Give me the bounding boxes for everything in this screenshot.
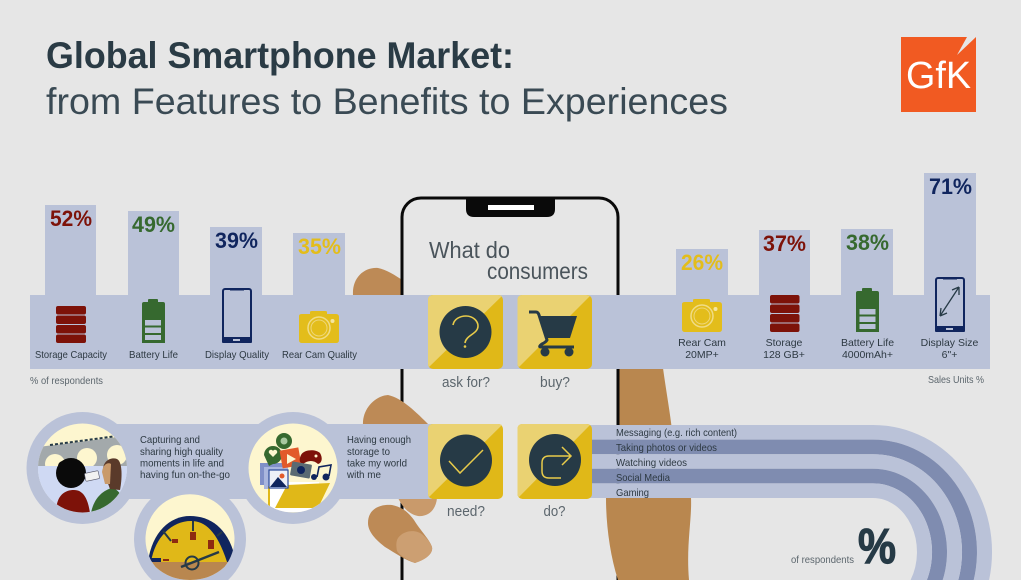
hand: right palm behind phone <box>610 360 672 430</box>
right labels: Rear Cam <box>678 337 726 349</box>
text: enough storage <box>346 434 411 481</box>
right labels: 20MP+ <box>685 349 719 361</box>
right labels: 6"+ <box>942 349 957 361</box>
left percentages: 35% <box>298 234 341 259</box>
right percentages: 37% <box>763 231 806 256</box>
axis note: sales units: Sales Units % <box>928 374 984 386</box>
hand: upper finger behind left band <box>363 395 430 426</box>
right labels: Storage <box>766 337 803 349</box>
title: Global Smartphone Market: <box>46 35 514 76</box>
icon: battery left <box>142 299 165 343</box>
icon: storage right <box>770 295 800 332</box>
right labels: 128 GB+ <box>763 349 805 361</box>
activity labels: Watching videos <box>616 457 687 469</box>
yellow tile: need <box>428 424 503 499</box>
icon: storage left <box>56 306 86 343</box>
activity labels: Messaging (e.g. rich content) <box>616 427 737 439</box>
text: capturing moments: moments in life and <box>140 458 224 470</box>
hand: lower finger knuckle <box>398 498 437 516</box>
text: capturing moments <box>140 434 230 481</box>
illustration: performance gauge <box>145 494 236 580</box>
heading: what do consumers <box>429 237 588 284</box>
right percentages <box>681 174 972 275</box>
right percentages: 71% <box>929 174 972 199</box>
text: enough storage: Having enough <box>347 434 411 446</box>
activity bands with arcs <box>590 425 992 580</box>
tile captions: do? <box>544 504 566 520</box>
tile captions <box>442 375 570 520</box>
yellow tile: buy <box>518 295 592 369</box>
right labels: Battery Life <box>841 337 894 349</box>
GfK logo <box>901 37 976 112</box>
left percentages: 52% <box>50 206 92 231</box>
illustration: storage folder of media <box>248 423 338 513</box>
title <box>46 35 728 122</box>
activity labels: Social Media <box>616 472 670 484</box>
axis note: % of respondents: % of respondents <box>30 375 103 387</box>
activity labels: Taking photos or videos <box>616 442 717 454</box>
icon: camera right <box>682 299 722 332</box>
right percentages: 26% <box>681 250 723 275</box>
left percentages: 39% <box>215 228 258 253</box>
left labels: Battery Life <box>129 349 178 361</box>
left labels <box>35 349 358 361</box>
icon: display size with arrow <box>935 277 965 332</box>
hand: thumb behind phone <box>353 268 410 295</box>
left percentages <box>50 206 341 259</box>
top panel: band and bars <box>30 173 990 369</box>
icon: battery right <box>856 288 879 332</box>
left percentages: 49% <box>132 212 175 237</box>
title: from Features to Benefits to Experiences <box>46 81 728 122</box>
hand: palm over phone <box>606 498 691 580</box>
lower left band with circles <box>26 412 432 580</box>
hand: lower finger with nail <box>368 505 432 563</box>
right percentages: 38% <box>846 230 889 255</box>
yellow tile: ask for <box>428 295 503 369</box>
left labels: Rear Cam Quality <box>282 349 358 361</box>
heading: what do consumers: consumers <box>487 258 588 284</box>
tile captions: ask for? <box>442 375 490 391</box>
text: capturing moments: having fun on-the-go <box>140 469 230 481</box>
phone outline <box>402 198 618 580</box>
yellow tile: do <box>518 424 592 499</box>
tile captions: buy? <box>540 375 570 391</box>
activity labels <box>616 427 737 499</box>
large percent sign: % <box>858 520 896 574</box>
text: enough storage: with me <box>346 469 381 481</box>
heading: what do consumers: What do <box>429 237 510 263</box>
illustration: friends taking a photo <box>38 423 128 513</box>
left labels: Display Quality <box>205 349 270 361</box>
text: enough storage: storage to <box>347 446 390 458</box>
GfK logo: GfK <box>906 55 971 97</box>
text: enough storage: take my world <box>347 458 407 470</box>
icon: camera left <box>299 311 339 343</box>
note: of respondents: of respondents <box>791 554 854 566</box>
right labels: 4000mAh+ <box>842 349 893 361</box>
left labels: Storage Capacity <box>35 349 108 361</box>
right labels <box>678 337 979 361</box>
text: capturing moments: sharing high quality <box>140 446 224 458</box>
right labels: Display Size <box>921 337 979 349</box>
icon: display left <box>222 288 252 343</box>
activity labels: Gaming <box>616 487 649 499</box>
tile captions: need? <box>447 504 485 520</box>
text: capturing moments: Capturing and <box>140 434 200 446</box>
